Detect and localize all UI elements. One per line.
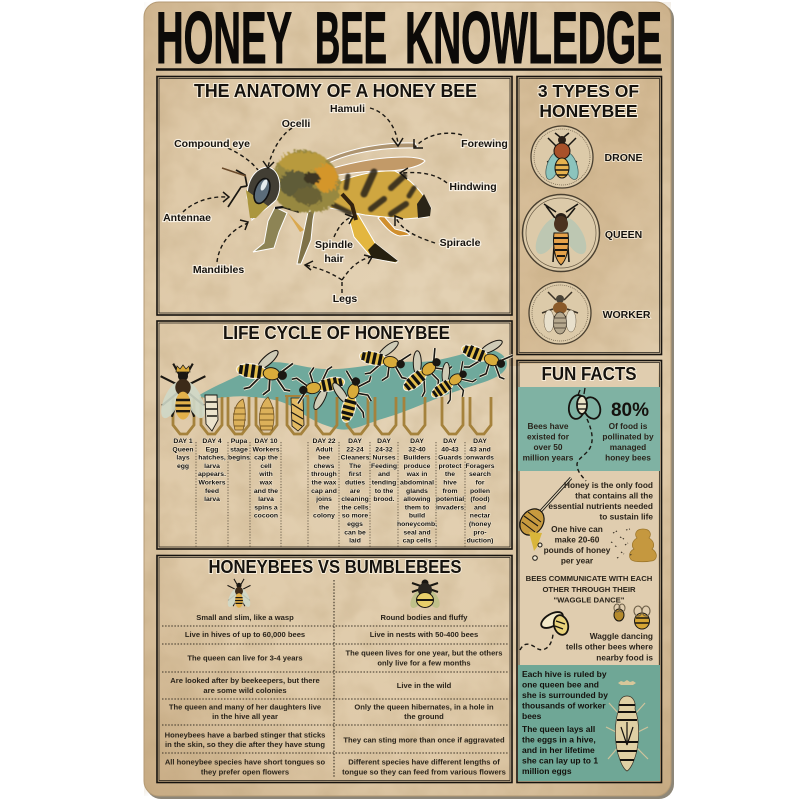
- fact: each hive: The queen lays all: [522, 724, 595, 734]
- day-by-day text: pollen: [470, 488, 490, 495]
- day-by-day text: and: [474, 504, 486, 511]
- day-by-day text: Pupa: [231, 438, 248, 445]
- day-by-day text: seal and: [403, 529, 431, 536]
- anatomy labels: Antennae: [163, 212, 211, 224]
- heading: anatomy: THE ANATOMY OF A HONEY BEE: [194, 81, 477, 101]
- anatomy labels: hair: [324, 253, 344, 265]
- day-by-day text: (honey: [469, 521, 491, 528]
- icon: honey dipper: [515, 478, 571, 560]
- day-by-day text: cocoon: [254, 513, 278, 520]
- day-by-day text: Adult: [315, 446, 333, 453]
- panel: life cycle of honeybee: [157, 321, 518, 549]
- cream background: [520, 364, 658, 779]
- heading: types: HONEYBEE: [539, 101, 638, 121]
- fact: bees have existed: existed for: [527, 432, 570, 442]
- fact: bees have existed: Bees have: [527, 421, 569, 431]
- anatomy labels: Spindle: [315, 239, 353, 251]
- day-by-day text: larva: [204, 463, 220, 470]
- day-by-day text: 24-32: [375, 446, 393, 453]
- fact: each hive: and in her lifetime: [522, 745, 595, 755]
- day-by-day text: [172, 438, 495, 545]
- icon: bumblebee: [408, 580, 442, 610]
- day-by-day text: Foragers: [465, 463, 495, 470]
- day-by-day text: appears.: [198, 471, 226, 478]
- day-by-day text: duction): [467, 538, 493, 545]
- day-by-day text: Egg: [206, 446, 218, 453]
- fact: waggle heading: "WAGGLE DANCE": [554, 596, 625, 604]
- day-by-day text: DAY 4: [202, 438, 222, 445]
- honeybee column: in the skin, so they die after they have stung: [165, 740, 325, 749]
- fact: pollinated: pollinated by: [602, 432, 654, 442]
- fact: honey only food: to sustain life: [600, 512, 653, 522]
- day-by-day text: lays: [176, 455, 190, 462]
- day-by-day text: 32-40: [408, 446, 426, 453]
- fact: waggle dancing: Waggle dancing: [590, 631, 653, 641]
- day-by-day text: cell: [260, 463, 272, 470]
- title rule: [156, 68, 662, 71]
- stat: 80 percent: 80%: [611, 400, 649, 421]
- fact: waggle heading: OTHER THROUGH THEIR: [542, 585, 636, 594]
- day-by-day text: can be: [344, 529, 366, 536]
- day-by-day text: larva: [258, 496, 274, 503]
- pupae in cells: [205, 395, 309, 431]
- anatomy labels: Legs: [333, 293, 357, 305]
- day-by-day text: The: [349, 463, 361, 470]
- heading: life cycle: LIFE CYCLE OF HONEYBEE: [223, 323, 450, 343]
- day-by-day text: glands: [406, 488, 428, 495]
- bumblebee column: Live in nests with 50-400 bees: [370, 630, 478, 639]
- day-by-day text: 43 and: [469, 446, 491, 453]
- day-by-day text: (food): [470, 496, 490, 503]
- icon: honeybee: [226, 579, 252, 608]
- bumblebee column: Round bodies and fluffy: [381, 613, 468, 622]
- day-by-day text: DAY: [348, 438, 362, 445]
- column dividers: [196, 442, 465, 547]
- anatomy labels: Hindwing: [449, 181, 497, 193]
- day-by-day text: Workers: [198, 480, 226, 486]
- anatomy labels: Spiracle: [440, 237, 481, 249]
- fact: one hive: One hive can: [551, 524, 603, 534]
- brood cell tubes: [173, 397, 491, 434]
- day-by-day text: Workers: [252, 446, 280, 453]
- day-by-day text: and: [378, 471, 390, 478]
- fact: bees have existed: over 50: [533, 442, 563, 452]
- fact: waggle dancing: nearby food is: [596, 652, 653, 662]
- day-by-day text: search: [469, 471, 491, 478]
- honeybee column: Are looked after by beekeepers, but there: [170, 676, 320, 685]
- day-by-day text: hive: [443, 480, 457, 486]
- fact: honey only food: Honey is the only food: [564, 480, 653, 490]
- teal block: top facts: [518, 387, 660, 471]
- bumblebee column: The queen lives for one year, but the others: [346, 648, 502, 658]
- day-by-day text: honeycomb,: [397, 521, 437, 528]
- day-by-day text: onwards: [466, 455, 494, 462]
- fact: bees have existed: million years: [523, 452, 574, 462]
- day-by-day text: colony: [313, 513, 335, 520]
- day-by-day text: brood.: [373, 496, 395, 503]
- day-by-day text: tending: [372, 480, 396, 486]
- day-by-day text: Cleaners: [341, 455, 370, 462]
- worker bees flying along the band: [234, 326, 518, 427]
- day-by-day text: cap the: [254, 455, 278, 462]
- fact: each hive: she can lay up to 1: [522, 756, 598, 766]
- bumblebee column: [342, 613, 506, 776]
- bumblebee column: only live for a few months: [377, 658, 471, 668]
- label: queen: QUEEN: [605, 229, 642, 241]
- day-by-day text: with: [258, 471, 273, 478]
- day-by-day text: invaders: [436, 504, 464, 511]
- honeybee column: All honeybee species have short tongues so: [165, 758, 326, 766]
- table dividers: [162, 580, 508, 778]
- day-by-day text: joins: [315, 496, 332, 503]
- fact: pollinated: Of food is: [609, 421, 648, 431]
- panel: anatomy of a honey bee: [157, 76, 512, 315]
- anatomy labels: Forewing: [461, 138, 508, 150]
- day-by-day text: egg: [177, 463, 189, 470]
- fact: honey only food: essential nutrients needed: [548, 501, 653, 511]
- honeybee column: in the hive all year: [212, 712, 278, 721]
- day-by-day text: duties: [345, 480, 365, 486]
- icon: queen bee with crown: [606, 680, 648, 771]
- fact: waggle heading: BEES COMMUNICATE WITH EACH: [526, 574, 653, 583]
- day-by-day text: larva: [204, 496, 220, 503]
- day-by-day text: chews: [314, 463, 335, 470]
- day-by-day text: eggs: [347, 521, 363, 528]
- day-by-day text: produce: [404, 463, 431, 470]
- label: drone: DRONE: [605, 152, 642, 164]
- icon: drone: [531, 126, 593, 188]
- day-by-day text: them to: [405, 504, 429, 511]
- fact: one hive: make 20-60: [555, 534, 600, 544]
- day-by-day text: build: [409, 513, 425, 520]
- day-by-day text: are: [350, 488, 360, 495]
- honeybee column: Live in hives of up to 60,000 bees: [185, 630, 305, 639]
- fact: each hive: thousands of worker: [522, 700, 606, 710]
- honeybee column: [165, 613, 326, 776]
- day-by-day text: protect: [438, 463, 462, 470]
- day-by-day text: allowing: [403, 496, 431, 503]
- day-by-day text: through: [311, 471, 337, 478]
- day-by-day text: DAY 1: [173, 438, 193, 445]
- day-by-day text: first: [349, 471, 362, 478]
- day-by-day text: hatches,: [198, 455, 226, 462]
- icon: queen: [522, 194, 600, 272]
- day-by-day text: feed: [205, 488, 219, 495]
- panel: honeybees vs bumblebees: [157, 556, 512, 782]
- anatomy labels: Compound eye: [174, 138, 250, 150]
- day-by-day text: laid: [349, 538, 361, 545]
- day-by-day text: spins a: [254, 504, 278, 511]
- panel: fun facts: [515, 360, 662, 782]
- day-by-day text: DAY 10: [254, 438, 278, 445]
- icon: waggling bee: [539, 609, 570, 636]
- day-by-day text: so more: [342, 513, 368, 520]
- label: worker: WORKER: [603, 309, 651, 321]
- honeybee column: The queen can live for 3-4 years: [187, 654, 303, 662]
- dashed flight path: [577, 419, 592, 481]
- title: HONEY: [156, 0, 292, 79]
- queen bee with crown: [157, 364, 209, 421]
- day-by-day text: pro-: [473, 529, 487, 536]
- day-by-day text: and the: [254, 488, 278, 495]
- teal block: queen facts: [518, 665, 660, 781]
- honeybee column: they prefer open flowers: [201, 768, 289, 776]
- metal sign background: [144, 2, 674, 799]
- arrows: anatomy callouts: [183, 108, 462, 293]
- honeybee column: Honeybees have a barbed stinger that sticks: [165, 730, 325, 740]
- heading: fun facts: FUN FACTS: [542, 364, 636, 384]
- fact: each hive: one queen bee and: [522, 680, 599, 690]
- fact: each hive: Each hive is ruled by: [522, 669, 607, 679]
- anatomy labels: Ocelli: [282, 118, 310, 130]
- heading: versus: HONEYBEES VS BUMBLEBEES: [208, 557, 462, 577]
- icon: honey pot: [611, 529, 656, 562]
- bumblebee column: tongue so they can feed from various flowers: [342, 768, 506, 776]
- bumblebee column: They can sting more than once if aggravated: [343, 736, 505, 744]
- honeybee column: are some wild colonies: [203, 686, 287, 695]
- fact: each hive: million eggs: [522, 766, 572, 776]
- day-by-day text: abdominal: [400, 480, 434, 486]
- panel: 3 types of honeybee: [517, 76, 662, 354]
- anatomy labels: Mandibles: [193, 264, 244, 276]
- day-by-day text: cap and: [311, 488, 337, 495]
- dashed waggle path: [520, 634, 553, 650]
- icon: outlined bee: [567, 388, 603, 421]
- fact: one hive: per year: [561, 556, 594, 566]
- day-by-day text: cap cells: [403, 538, 432, 545]
- fact: pollinated: honey bees: [605, 452, 651, 462]
- heading: types: 3 TYPES OF: [538, 81, 639, 101]
- day-by-day text: DAY 22: [312, 438, 336, 445]
- day-by-day text: DAY: [473, 438, 487, 445]
- day-by-day text: Nurses: [372, 455, 396, 462]
- title: BEE: [315, 0, 387, 79]
- fact: honey only food: that contains all the: [575, 490, 653, 500]
- day-by-day text: DAY: [410, 438, 424, 445]
- day-by-day text: the: [319, 504, 329, 511]
- day-by-day text: Queen: [172, 446, 194, 453]
- illustration: honey bee: [222, 143, 431, 264]
- fact: each hive: the eggs in a hive,: [522, 734, 596, 744]
- day-by-day text: wax: [259, 480, 273, 486]
- day-by-day text: the wax: [312, 480, 337, 486]
- fact: each hive: she is surrounded by: [522, 690, 608, 700]
- day-by-day text: the: [445, 471, 455, 478]
- bumblebee column: the ground: [404, 712, 444, 721]
- honeybee column: The queen and many of her daughters live: [169, 702, 321, 712]
- honeybee column: Small and slim, like a wasp: [196, 613, 294, 622]
- fact: waggle dancing: tells other bees where: [566, 642, 653, 652]
- teal wave band: [198, 349, 507, 430]
- day-by-day text: 40-43: [441, 446, 459, 453]
- anatomy labels: [163, 103, 508, 305]
- day-by-day text: begins: [228, 455, 250, 462]
- fact: pollinated: managed: [610, 442, 646, 452]
- day-by-day text: Feeding: [371, 463, 397, 470]
- day-by-day text: 22-24: [346, 446, 364, 453]
- day-by-day text: DAY: [377, 438, 391, 445]
- day-by-day text: to the: [375, 488, 393, 495]
- day-by-day text: stage: [230, 446, 248, 453]
- day-by-day text: for: [475, 480, 485, 486]
- bumblebee column: Live in the wild: [397, 681, 452, 690]
- day-by-day text: potential: [436, 496, 464, 503]
- fact: one hive: pounds of honey: [544, 545, 611, 555]
- icon: worker: [529, 282, 591, 344]
- icons: small bees: [614, 604, 650, 629]
- anatomy labels: Hamuli: [330, 103, 365, 115]
- day-by-day text: the cells: [341, 504, 369, 511]
- day-by-day text: DAY: [443, 438, 457, 445]
- bumblebee column: Different species have different lengths of: [348, 758, 500, 766]
- day-by-day text: cleaning: [341, 496, 369, 503]
- day-by-day text: nectar: [470, 513, 491, 520]
- day-by-day text: from: [442, 488, 458, 495]
- day-by-day text: bee: [318, 455, 330, 462]
- fact: each hive: bees: [522, 711, 542, 721]
- day-by-day text: wax in: [406, 471, 427, 478]
- bumblebee column: Only the queen hibernates, in a hole in: [354, 702, 494, 712]
- title: [156, 0, 662, 79]
- day-by-day text: Guards: [438, 455, 462, 462]
- day-by-day text: Builders: [403, 455, 431, 462]
